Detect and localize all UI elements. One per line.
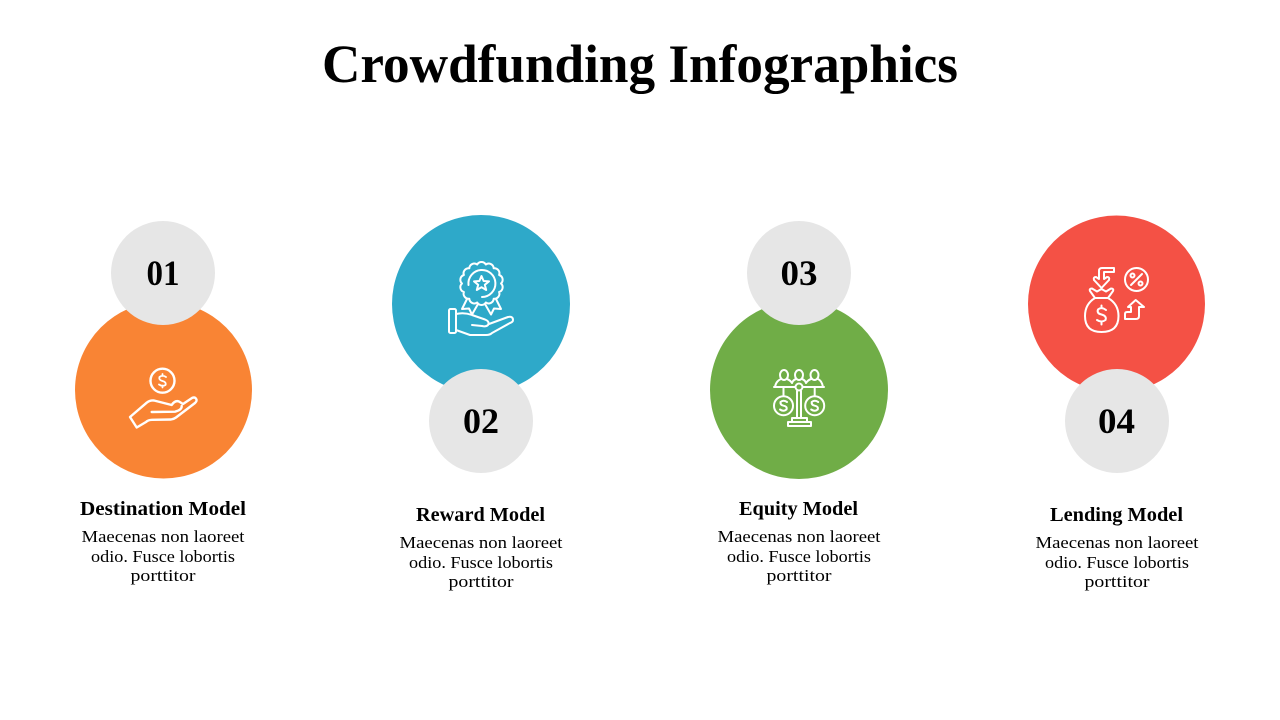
description: Maecenas non laoreet [1036, 533, 1199, 552]
heading: Reward Model [416, 504, 545, 526]
heading: Destination Model [80, 498, 246, 520]
panel: equity model [710, 221, 888, 585]
description: odio. Fusce lobortis [727, 547, 871, 566]
red circle [1028, 216, 1205, 392]
description: porttitor [448, 572, 514, 591]
description: odio. Fusce lobortis [91, 547, 235, 566]
description [718, 527, 881, 585]
orange circle [75, 302, 252, 478]
number badge 02: 02 [463, 401, 499, 441]
number badge 02 [429, 369, 533, 473]
panel: reward model [392, 215, 570, 591]
description: Maecenas non laoreet [718, 527, 881, 546]
number badge 03 [747, 221, 851, 325]
panel: lending model [1028, 216, 1205, 591]
number badge 01 [111, 221, 215, 325]
number badge 04 [1065, 369, 1169, 473]
description: odio. Fusce lobortis [409, 553, 553, 572]
icon: balance scale with people and coins [774, 370, 824, 426]
description: porttitor [1084, 572, 1150, 591]
icon: money bag with arrows and percent [1085, 268, 1148, 332]
description: odio. Fusce lobortis [1045, 553, 1189, 572]
title: Crowdfunding Infographics [322, 34, 958, 94]
number badge 04: 04 [1098, 401, 1135, 441]
icon: hand holding award [449, 262, 513, 335]
number badge 03: 03 [780, 253, 818, 293]
description: Maecenas non laoreet [400, 533, 563, 552]
green circle [710, 301, 888, 479]
blue circle [392, 215, 570, 393]
heading: Lending Model [1050, 504, 1183, 526]
description: porttitor [766, 566, 832, 585]
panel: destination model [75, 221, 252, 585]
description [1036, 533, 1199, 591]
description: Maecenas non laoreet [82, 527, 245, 546]
heading: Equity Model [739, 498, 858, 520]
description [400, 533, 563, 591]
icon: hand holding coin [130, 369, 197, 428]
description [82, 527, 245, 585]
number badge 01: 01 [146, 253, 180, 293]
description: porttitor [130, 566, 196, 585]
